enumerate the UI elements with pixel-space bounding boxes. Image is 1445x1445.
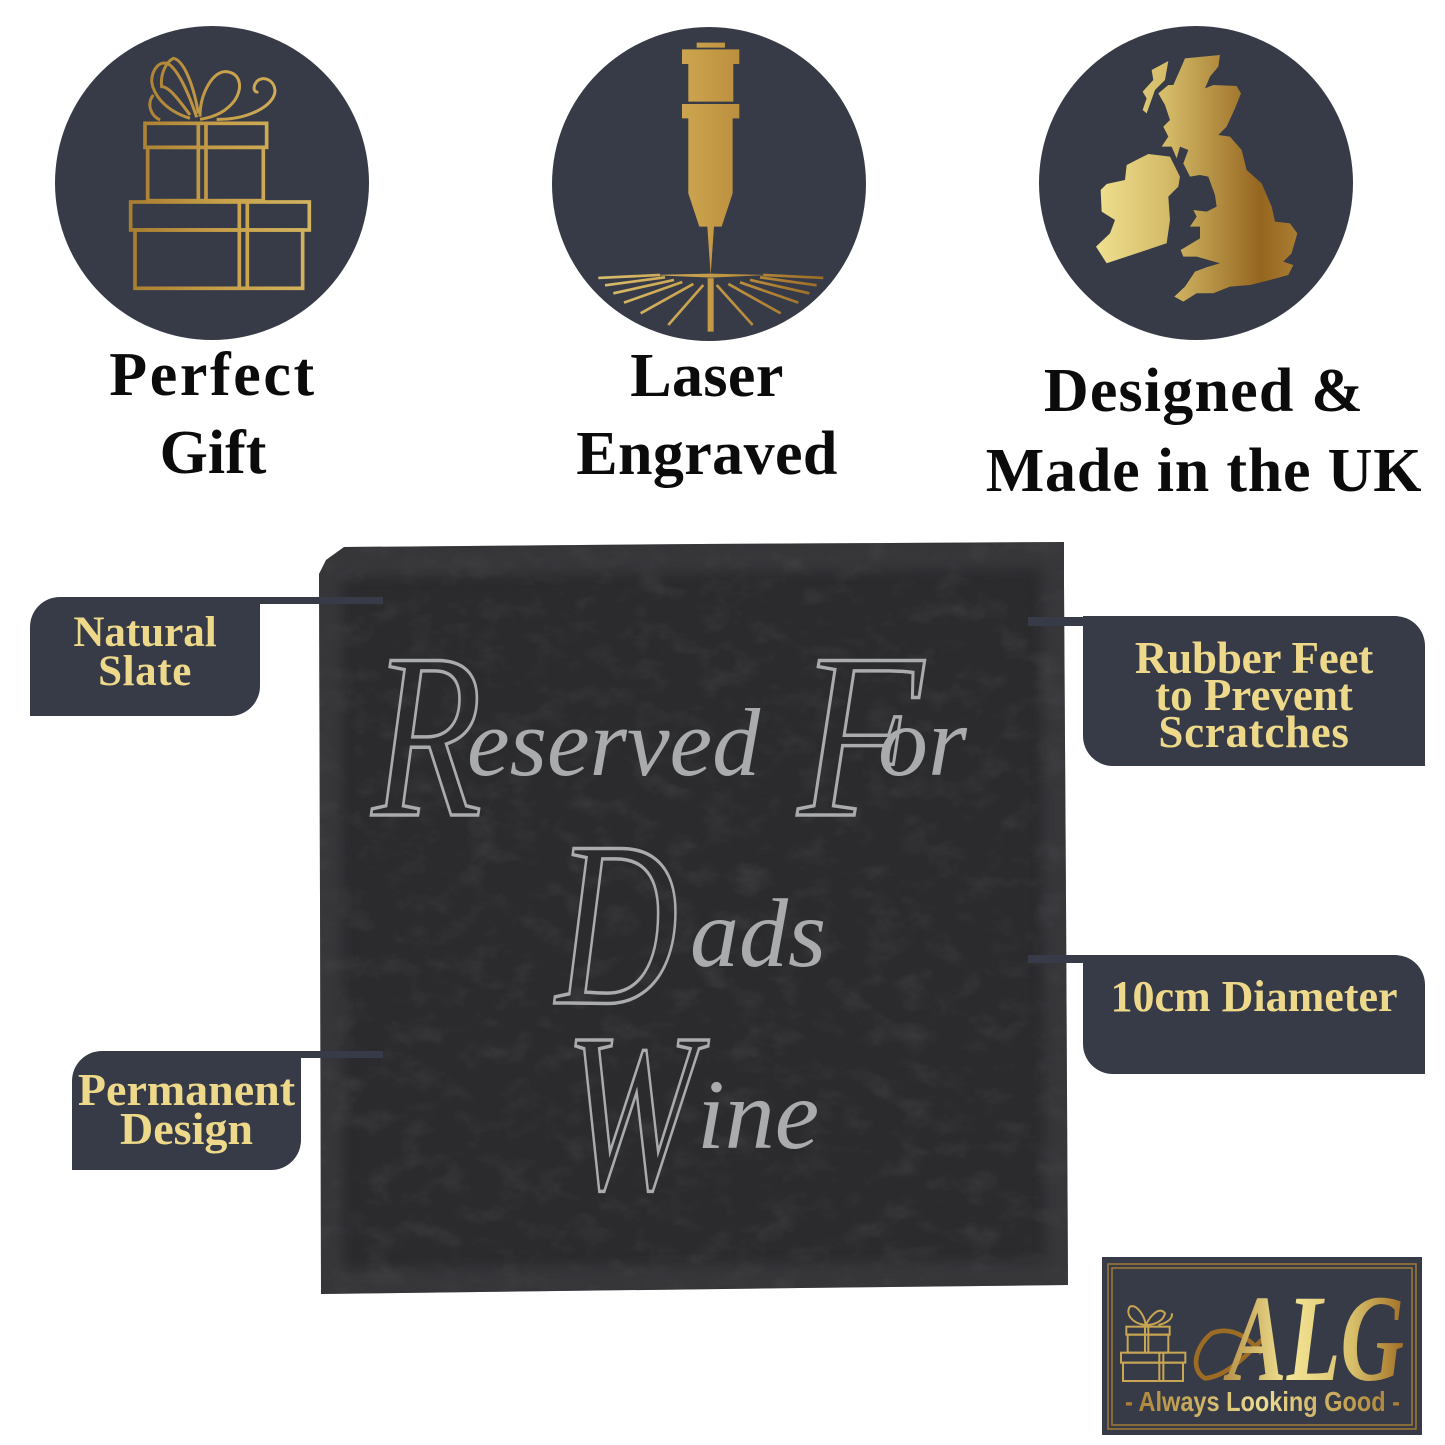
icon: UK and Ireland map <box>1039 26 1353 340</box>
callout: 10cm Diameter <box>1083 955 1425 1074</box>
heading: Perfect Gift: Perfect <box>109 341 317 409</box>
callout: 10cm Diameter: 10cm Diameter <box>1110 972 1398 1021</box>
heading: Designed and Made in the UK: Designed & <box>1044 357 1364 425</box>
heading: Laser Engraved <box>576 342 838 488</box>
leader line: Permanent Design <box>298 1051 383 1058</box>
slate coaster <box>319 542 1068 1294</box>
callout: Natural Slate: Natural <box>73 609 217 656</box>
icon: laser engraver <box>552 27 866 341</box>
heading: Designed and Made in the UK: Made in the UK <box>986 437 1422 505</box>
heading: Laser Engraved: Laser <box>630 342 784 410</box>
callout: Rubber Feet: to Prevent <box>1155 670 1353 720</box>
heading: Perfect Gift: Gift <box>160 419 266 487</box>
engraved text lines: eserved <box>467 689 784 796</box>
engraved text lines <box>370 606 968 1237</box>
engraved text lines: D <box>554 794 678 1055</box>
engraved text lines: ine <box>697 1059 819 1170</box>
leader line: 10cm Diameter <box>1028 955 1088 963</box>
heading: Designed and Made in the UK <box>986 357 1422 505</box>
callout: Permanent Design: Permanent <box>78 1064 295 1115</box>
callout: Natural Slate: Slate <box>98 648 192 695</box>
callout: Rubber Feet: Rubber Feet <box>1135 633 1373 683</box>
leader line: Rubber Feet <box>1028 617 1088 626</box>
rough stone edge <box>325 552 1062 1286</box>
logo tagline: - Always Looking Good - <box>1125 1386 1400 1417</box>
callout: Natural Slate <box>30 597 260 716</box>
engraved text lines: or <box>878 686 968 797</box>
engraved text lines: F <box>796 606 925 867</box>
leader line: Natural Slate <box>258 597 383 604</box>
engraved text lines: ads <box>690 880 826 988</box>
logo gift icon <box>1121 1306 1185 1381</box>
heading: Laser Engraved: Engraved <box>576 420 838 488</box>
engraved text lines: W <box>565 987 709 1237</box>
callout: Permanent Design <box>72 1051 301 1170</box>
engraved text lines: R <box>370 606 482 867</box>
heading: Perfect Gift <box>109 341 317 487</box>
callout: Rubber Feet: Scratches <box>1158 707 1350 757</box>
callout: Rubber Feet <box>1083 616 1425 766</box>
callout: Permanent Design: Design <box>120 1103 253 1154</box>
icon: gift boxes <box>55 26 369 340</box>
